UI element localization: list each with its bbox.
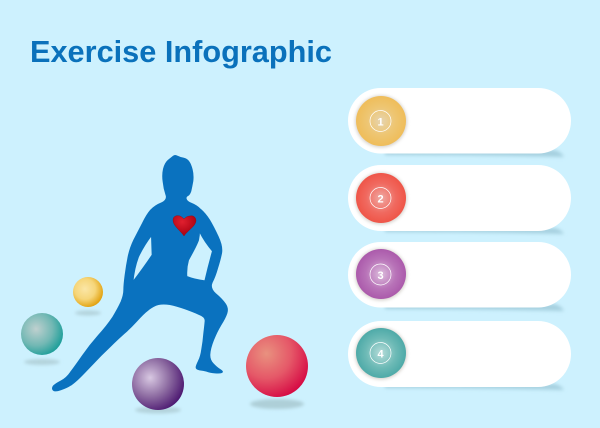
panel: option 1	[348, 88, 571, 157]
badge 4: 4	[377, 348, 384, 360]
badge 2	[356, 173, 406, 223]
ball: red	[246, 335, 308, 409]
ball: purple	[132, 358, 184, 414]
icon: heart	[173, 216, 196, 236]
badge 1	[356, 96, 406, 146]
ball: yellow	[73, 277, 103, 316]
title: Exercise Infographic	[30, 34, 332, 69]
panel: option 4	[348, 321, 571, 390]
panel: option 3	[348, 242, 571, 311]
badge 2: 2	[377, 194, 384, 206]
badge 3	[356, 249, 406, 299]
ball: teal	[21, 313, 63, 365]
badge 3: 3	[377, 270, 384, 282]
badge 4	[356, 328, 406, 378]
badge 1: 1	[377, 116, 384, 128]
panel: option 2	[348, 165, 571, 234]
figure: exercising woman silhouette	[53, 156, 227, 391]
